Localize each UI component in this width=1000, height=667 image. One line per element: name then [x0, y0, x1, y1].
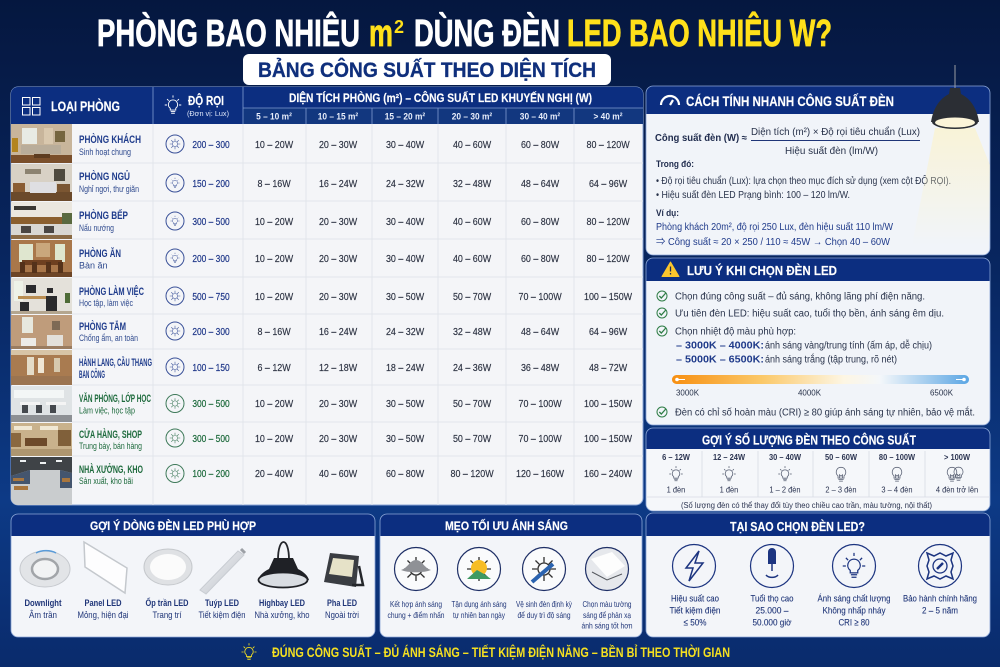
tip: combine light: chung + điểm nhấn: [388, 610, 445, 620]
tip: bright walls: ánh sáng tốt hơn: [582, 620, 633, 630]
row: phòng khách: 20 – 30W: [319, 139, 358, 151]
row: phòng làm việc: 500 – 750: [192, 291, 230, 303]
lamp: ceiling: [144, 549, 192, 621]
table header: [11, 87, 643, 124]
lamp: downlight: Âm trần: [29, 610, 57, 621]
row: phòng bếp: 30 – 40W: [386, 216, 425, 228]
colour temperature bar: [672, 375, 969, 398]
panel: number of lamps: [646, 428, 990, 511]
row: phòng ngủ: 150 – 200: [192, 178, 230, 190]
lamp: tube: Tiết kiệm điện: [198, 610, 246, 621]
title: LED BAO NHIÊU W?: [567, 11, 832, 55]
row: văn phòng, lớp học: 10 – 20W: [255, 398, 294, 410]
row: phòng ăn: 30 – 40W: [386, 253, 425, 265]
benefit: warranty: [903, 544, 977, 616]
photo: home office: [11, 278, 72, 314]
row: cửa hàng, shop: 10 – 20W: [255, 433, 294, 445]
colour temperature bar: 6500K: [930, 388, 954, 398]
row: hành lang: HÀNH LANG, CẦU THANG: [79, 356, 152, 369]
checklist: Chọn nhiệt độ màu phù hợp:: [675, 326, 796, 338]
panel: why choose LED: [646, 513, 990, 637]
benefit: efficiency: [670, 544, 720, 628]
row: phòng ngủ: PHÒNG NGỦ: [79, 170, 130, 183]
photo: warehouse: [11, 457, 72, 505]
row: cửa hàng, shop: 300 – 500: [192, 433, 230, 445]
row: phòng ngủ: 32 – 48W: [453, 178, 492, 190]
lamp counts: 6 – 12W: [662, 453, 690, 462]
row: nhà xưởng, kho: [11, 457, 633, 505]
row: phòng ngủ: 24 – 32W: [386, 178, 425, 190]
tip: daylight: Tận dụng ánh sáng: [452, 599, 507, 609]
table header: 20 – 30 m²: [452, 111, 492, 122]
row: phòng tắm: Chống ẩm, an toàn: [79, 333, 138, 343]
lamp counts: 12 – 24W: [713, 453, 745, 462]
table header: 30 – 40 m²: [520, 111, 560, 122]
icon: pendant lamp: [912, 65, 990, 245]
photo: bedroom: [11, 164, 72, 201]
photo: office: [11, 386, 72, 422]
row: phòng tắm: 8 – 16W: [257, 326, 291, 338]
row: phòng khách: 10 – 20W: [255, 139, 294, 151]
lamp: ceiling: Trang trí: [152, 610, 182, 621]
checklist: [657, 290, 944, 366]
formula: Công suất đèn (W) ≈: [655, 132, 747, 144]
benefit: efficiency: Hiệu suất cao: [671, 594, 719, 604]
checklist: ánh sáng trắng (tập trung, rõ nét): [765, 352, 897, 366]
row: phòng khách: PHÒNG KHÁCH: [79, 133, 141, 146]
row: hành lang: 48 – 72W: [589, 362, 628, 374]
tip: bright walls: [582, 548, 633, 630]
row: phòng tắm: 48 – 64W: [521, 326, 560, 338]
lamp: flood: Ngoài trời: [325, 610, 359, 621]
row: phòng ngủ: 64 – 96W: [589, 178, 628, 190]
benefit: lifespan: 50.000 giờ: [752, 618, 792, 628]
row: phòng tắm: PHÒNG TẮM: [79, 320, 126, 333]
benefit: light quality: [818, 544, 890, 628]
row: phòng ngủ: 8 – 16W: [257, 178, 291, 190]
row: phòng ăn: 10 – 20W: [255, 253, 294, 265]
row: phòng làm việc: 100 – 150W: [584, 291, 633, 303]
row: phòng tắm: 32 – 48W: [453, 326, 492, 338]
row: phòng bếp: 60 – 80W: [521, 216, 560, 228]
tip: daylight: tự nhiên ban ngày: [453, 610, 506, 620]
row: cửa hàng, shop: 70 – 100W: [518, 433, 562, 445]
panel: quick calculation: [646, 86, 990, 255]
checklist: Ưu tiên đèn LED: hiệu suất cao, tuổi thọ bền, ánh sáng êm dịu.: [675, 308, 944, 320]
row: phòng bếp: PHÒNG BẾP: [79, 209, 128, 222]
title: PHÒNG BAO NHIÊU: [97, 11, 360, 55]
lamp counts: 50 – 60W: [825, 453, 857, 462]
lamp counts: 1 đèn: [667, 485, 685, 495]
row: nhà xưởng, kho: Sản xuất, kho bãi: [79, 476, 133, 486]
lamp counts: 3 – 4 đèn: [881, 485, 913, 495]
benefit: warranty: 2 – 5 năm: [922, 606, 958, 616]
row: phòng khách: [11, 124, 630, 163]
colour temperature bar: 4000K: [798, 388, 822, 398]
row: văn phòng, lớp học: 70 – 100W: [518, 398, 562, 410]
photo: living room: [11, 124, 72, 163]
row: phòng tắm: [11, 315, 628, 349]
colour temperature bar: 3000K: [676, 388, 700, 398]
lamp: flood: Pha LED: [327, 598, 357, 609]
row: phòng tắm: 64 – 96W: [589, 326, 628, 338]
row: văn phòng, lớp học: 30 – 50W: [386, 398, 425, 410]
row: phòng khách: Sinh hoạt chung: [79, 147, 131, 157]
row: phòng làm việc: 50 – 70W: [453, 291, 492, 303]
row: phòng ngủ: Nghỉ ngơi, thư giãn: [79, 184, 139, 194]
row: phòng bếp: Nấu nướng: [79, 223, 114, 233]
title: 2: [394, 17, 404, 37]
lamp counts: > 100W: [944, 453, 970, 462]
tip: combine light: [388, 548, 445, 620]
table header: DIỆN TÍCH PHÒNG (m²) – CÔNG SUẤT LED KHUYẾN NGHỊ (W): [289, 92, 592, 105]
benefit: lifespan: Tuổi thọ cao: [750, 594, 794, 604]
row: phòng ngủ: [11, 164, 628, 201]
benefit: light quality: Không nhấp nháy: [822, 606, 886, 616]
tip: clean lamp: Vệ sinh đèn định kỳ: [516, 599, 573, 609]
panel: power table: [11, 87, 643, 505]
row: hành lang: BAN CÔNG: [79, 368, 105, 381]
row: phòng ăn: 60 – 80W: [521, 253, 560, 265]
row: phòng ăn: Bàn ăn: [79, 260, 108, 270]
panel: lighting tips: [380, 514, 642, 637]
row: phòng bếp: [11, 202, 630, 239]
example: [656, 208, 894, 248]
icon: warning: [662, 262, 679, 276]
benefit: warranty: Bảo hành chính hãng: [903, 594, 977, 604]
panel: why choose LED: TẠI SAO CHỌN ĐÈN LED?: [730, 519, 865, 534]
row: phòng ăn: 20 – 30W: [319, 253, 358, 265]
row: phòng tắm: 24 – 32W: [386, 326, 425, 338]
row: phòng ngủ: 16 – 24W: [319, 178, 358, 190]
row: hành lang: 100 – 150: [192, 362, 230, 374]
explanation: • Độ rọi tiêu chuẩn (Lux): lựa chọn theo mục đích sử dụng (xem cột ĐỘ RỌI).: [656, 174, 951, 187]
lamp: highbay: [254, 542, 310, 621]
row: phòng làm việc: 30 – 50W: [386, 291, 425, 303]
row: văn phòng, lớp học: 20 – 30W: [319, 398, 358, 410]
tip: bright walls: Chọn màu tường: [582, 599, 632, 609]
row: phòng khách: 200 – 300: [192, 139, 230, 151]
panel: quick calculation: CÁCH TÍNH NHANH CÔNG SUẤT ĐÈN: [686, 94, 894, 109]
benefit: lifespan: [750, 544, 794, 628]
row: cửa hàng, shop: [11, 423, 633, 456]
lamp counts: [662, 453, 978, 495]
explanation: • Hiệu suất đèn LED Prạng bình: 100 – 120 lm/W.: [656, 189, 850, 201]
row: hành lang: 36 – 48W: [521, 362, 560, 374]
title: m: [369, 13, 393, 55]
row: phòng ăn: 40 – 60W: [453, 253, 492, 265]
row: nhà xưởng, kho: 60 – 80W: [386, 468, 425, 480]
formula: [655, 126, 920, 157]
table header: ĐỘ RỌI: [188, 93, 224, 108]
row: hành lang: [11, 350, 628, 385]
benefit: light quality: CRI ≥ 80: [838, 618, 870, 628]
row: phòng làm việc: Học tập, làm việc: [79, 298, 133, 308]
CRI note: Đèn có chỉ số hoàn màu (CRI) ≥ 80 giúp ánh sáng tự nhiên, bảo vệ mắt.: [675, 406, 975, 418]
lamp counts: 80 – 100W: [879, 453, 916, 462]
panel: LED notes: [646, 258, 990, 425]
row: phòng khách: 80 – 120W: [586, 139, 630, 151]
lamp counts: 1 đèn: [720, 485, 738, 495]
lamp counts: 2 – 3 đèn: [825, 485, 857, 495]
panel: number of lamps: GỢI Ý SỐ LƯỢNG ĐÈN THEO CÔNG SUẤT: [702, 432, 916, 448]
table grid: [11, 124, 643, 505]
row: hành lang: 6 – 12W: [257, 362, 291, 374]
row: hành lang: 12 – 18W: [319, 362, 358, 374]
table header: 5 – 10 m²: [256, 111, 292, 122]
row: văn phòng, lớp học: 50 – 70W: [453, 398, 492, 410]
photo: shop: [11, 423, 72, 456]
row: phòng làm việc: 10 – 20W: [255, 291, 294, 303]
row: văn phòng, lớp học: Làm việc, học tập: [79, 406, 135, 416]
formula: Diện tích (m²) × Độ rọi tiêu chuẩn (Lux): [751, 126, 920, 138]
tip: combine light: Kết hợp ánh sáng: [390, 599, 442, 609]
photo: kitchen: [11, 202, 72, 239]
row: nhà xưởng, kho: 160 – 240W: [584, 468, 633, 480]
benefit: light quality: Ánh sáng chất lượng: [818, 594, 890, 604]
checklist: Chọn đúng công suất – đủ sáng, không lãng phí điện năng.: [675, 290, 925, 302]
lamp counts: 30 – 40W: [769, 453, 801, 462]
formula: Hiệu suất đèn (lm/W): [785, 145, 878, 157]
row: phòng khách: 40 – 60W: [453, 139, 492, 151]
row: phòng ăn: [11, 240, 630, 277]
table header: 10 – 15 m²: [318, 111, 358, 122]
benefit: efficiency: ≤ 50%: [684, 618, 707, 628]
lamp: downlight: [20, 551, 70, 621]
lamp: ceiling: Ốp trần LED: [146, 597, 189, 609]
row: phòng khách: 30 – 40W: [386, 139, 425, 151]
row: phòng bếp: 300 – 500: [192, 216, 230, 228]
row: cửa hàng, shop: CỬA HÀNG, SHOP: [79, 428, 142, 441]
row: phòng khách: 60 – 80W: [521, 139, 560, 151]
row: nhà xưởng, kho: 40 – 60W: [319, 468, 358, 480]
table header: 15 – 20 m²: [385, 111, 425, 122]
panel: lighting tips: MẸO TỐI ƯU ÁNH SÁNG: [445, 518, 568, 533]
subtitle pill: [243, 54, 611, 85]
row: cửa hàng, shop: Trung bày, bán hàng: [79, 441, 142, 451]
photo: corridor: [11, 350, 72, 385]
row: phòng bếp: 10 – 20W: [255, 216, 294, 228]
row: văn phòng, lớp học: VĂN PHÒNG, LỚP HỌC: [79, 392, 151, 405]
footer banner: [242, 643, 730, 660]
row: cửa hàng, shop: 30 – 50W: [386, 433, 425, 445]
row: văn phòng, lớp học: 100 – 150W: [584, 398, 633, 410]
benefit: lifespan: 25.000 –: [756, 606, 789, 616]
row: phòng bếp: 40 – 60W: [453, 216, 492, 228]
explanation: Trong đó:: [656, 159, 694, 170]
lamp: highbay: Highbay LED: [259, 598, 305, 609]
table header: (Đơn vị: Lux): [187, 109, 229, 118]
table header: > 40 m²: [593, 111, 623, 122]
row: phòng bếp: 20 – 30W: [319, 216, 358, 228]
row: phòng tắm: 16 – 24W: [319, 326, 358, 338]
photo: dining room: [11, 240, 72, 277]
title: DÙNG ĐÈN: [414, 11, 560, 55]
row: phòng ăn: PHÒNG ĂN: [79, 247, 121, 260]
row: phòng bếp: 80 – 120W: [586, 216, 630, 228]
lamp: panel LED: [78, 542, 128, 621]
lamp counts: 1 – 2 đèn: [769, 485, 801, 495]
panel: suggested LED lamps: [11, 514, 375, 637]
lamp: tube: Tuýp LED: [205, 598, 239, 609]
photo: bathroom: [11, 315, 72, 349]
row: phòng ngủ: 48 – 64W: [521, 178, 560, 190]
row: phòng làm việc: 70 – 100W: [518, 291, 562, 303]
benefit: efficiency: Tiết kiệm điện: [670, 606, 720, 616]
row: phòng làm việc: 20 – 30W: [319, 291, 358, 303]
title: [97, 11, 832, 55]
row: nhà xưởng, kho: 20 – 40W: [255, 468, 294, 480]
row: văn phòng, lớp học: [11, 386, 633, 422]
icon: gauge: [661, 96, 679, 105]
row: phòng tắm: 200 – 300: [192, 326, 230, 338]
example: Ví dụ:: [656, 208, 679, 219]
lamp: downlight: Downlight: [24, 598, 62, 609]
checklist: ánh sáng vàng/trung tính (ấm áp, dễ chịu): [765, 338, 932, 352]
row: nhà xưởng, kho: 100 – 200: [192, 468, 230, 480]
row: phòng làm việc: [11, 278, 633, 314]
checklist: – 5000K – 6500K:: [676, 354, 764, 366]
example: ⇒ Công suất ≈ 20 × 250 / 110 ≈ 45W → Chọn 40 – 60W: [656, 236, 891, 248]
panel: number of lamps: (Số lượng đèn có thể thay đổi tùy theo chiều cao trần, màu tường, nội thất): [681, 501, 932, 510]
lamp: highbay: Nhà xưởng, kho: [254, 610, 310, 621]
footer banner: ĐÚNG CÔNG SUẤT – ĐỦ ÁNH SÁNG – TIẾT KIỆM ĐIỆN NĂNG – BỀN BỈ THEO THỜI GIAN: [272, 643, 730, 660]
row: nhà xưởng, kho: NHÀ XƯỞNG, KHO: [79, 463, 143, 476]
lamp: flood: [324, 553, 363, 621]
lamp: panel LED: Panel LED: [84, 598, 122, 609]
icon: header bulb: [165, 95, 181, 113]
row: phòng ăn: 200 – 300: [192, 253, 230, 265]
row: cửa hàng, shop: 20 – 30W: [319, 433, 358, 445]
tip: daylight: [452, 548, 507, 620]
row: văn phòng, lớp học: 300 – 500: [192, 398, 230, 410]
lamp: tube: [198, 549, 246, 621]
table header: LOẠI PHÒNG: [51, 99, 120, 114]
panel: LED notes: LƯU Ý KHI CHỌN ĐÈN LED: [687, 263, 837, 278]
checklist: – 3000K – 4000K:: [676, 340, 764, 352]
panel: suggested LED lamps: GỢI Ý DÒNG ĐÈN LED PHÙ HỢP: [90, 518, 256, 533]
row: cửa hàng, shop: 50 – 70W: [453, 433, 492, 445]
explanation: [656, 159, 951, 201]
row: cửa hàng, shop: 100 – 150W: [584, 433, 633, 445]
row: phòng ăn: 80 – 120W: [586, 253, 630, 265]
example: Phòng khách 20m², độ rọi 250 Lux, đèn hiệu suất 110 lm/W: [656, 221, 894, 233]
tip: clean lamp: [516, 548, 573, 620]
row: hành lang: 24 – 36W: [453, 362, 492, 374]
row: nhà xưởng, kho: 80 – 120W: [450, 468, 494, 480]
lamp counts: 4 đèn trở lên: [936, 485, 978, 495]
subtitle pill: BẢNG CÔNG SUẤT THEO DIỆN TÍCH: [258, 58, 596, 82]
row: nhà xưởng, kho: 120 – 160W: [516, 468, 565, 480]
row: hành lang: 18 – 24W: [386, 362, 425, 374]
tip: bright walls: sáng để phản xạ: [583, 610, 631, 620]
icon: room grid: [22, 98, 40, 115]
tip: clean lamp: để duy trì độ sáng: [518, 610, 571, 620]
icon: yellow bulb: [242, 643, 256, 660]
lamp: panel LED: Mỏng, hiện đại: [78, 610, 128, 621]
row: phòng làm việc: PHÒNG LÀM VIỆC: [79, 285, 144, 298]
